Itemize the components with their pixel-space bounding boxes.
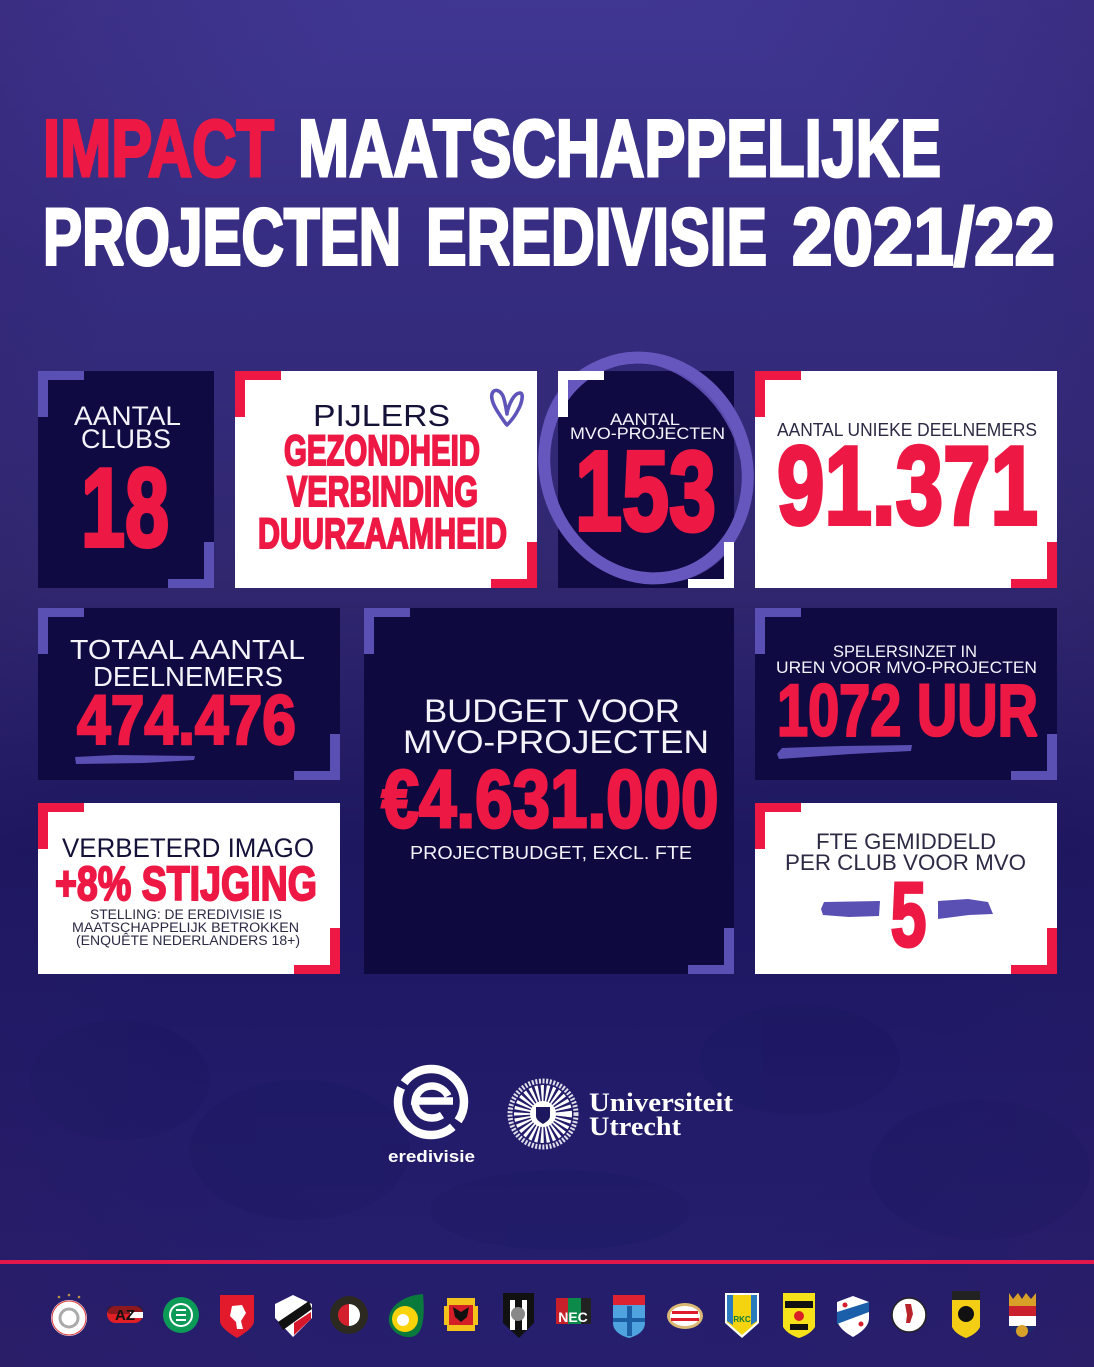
club badges [51,1291,1036,1338]
title: 2021/22 [792,192,1055,282]
panel: unieke deelnemers [755,371,1057,588]
brush underline [75,755,195,764]
panel: aantal mvo-projecten: AANTAL [610,410,680,429]
panel: spelersinzet: UREN VOOR MVO-PROJECTEN [776,658,1037,677]
logo: eredivisie [388,1069,475,1166]
panel: verbeterd imago: +8% STIJGING [55,858,317,911]
panel: pijlers: GEZONDHEID [284,427,480,475]
badge: heerenveen [837,1296,869,1337]
panel: aantal mvo-projecten [503,321,787,617]
badge: rkc: RKC [733,1315,751,1324]
badge: fortuna sittard [389,1294,424,1337]
panel: totaal aantal deelnemers: DEELNEMERS [93,661,283,692]
panel: totaal aantal deelnemers: 474.476 [77,681,296,759]
badge: utrecht [275,1295,312,1337]
badge: vitesse [952,1291,980,1338]
badge: heracles [503,1293,534,1338]
panel: budget: BUDGET VOOR [424,693,680,729]
panel: spelersinzet: SPELERSINZET IN [833,642,977,661]
panel: verbeterd imago: VERBETERD IMAGO [62,833,314,863]
brush marks [821,899,993,919]
badge: nec: NEC [558,1309,588,1325]
icon: heart [492,390,522,425]
badge: sparta [892,1298,926,1332]
badge: twente [220,1295,254,1338]
panel: fte: 5 [890,864,926,966]
title [43,104,1055,282]
panel: aantal clubs: AANTAL [74,401,181,431]
panel: fte: PER CLUB VOOR MVO [785,850,1026,875]
panel: budget: PROJECTBUDGET, EXCL. FTE [410,843,692,863]
badge: willem ii [1009,1293,1036,1337]
panel: budget: €4.631.000 [382,754,718,845]
badge: groningen [163,1297,199,1333]
panel: fte [755,803,1057,974]
title: IMPACT [43,104,274,194]
panel: budget [364,608,734,974]
panel: aantal clubs [38,371,214,588]
badge: go ahead eagles [444,1298,478,1331]
logo: eredivisie: eredivisie [388,1147,475,1166]
panel: aantal clubs: 18 [81,446,169,570]
title: EREDIVISIE [426,192,767,282]
panel: verbeterd imago: STELLING: DE EREDIVISIE IS [90,907,282,922]
badge: pec zwolle [613,1295,645,1338]
badge: nec [556,1298,591,1325]
badge: psv [667,1303,703,1329]
panel: verbeterd imago: (ENQUÊTE NEDERLANDERS 18+) [76,933,300,948]
panel: pijlers: VERBINDING [287,468,478,516]
panel: unieke deelnemers: AANTAL UNIEKE DEELNEMERS [777,420,1037,440]
panel: aantal mvo-projecten: 153 [575,428,716,554]
panel: aantal clubs: CLUBS [81,424,171,454]
panel: totaal aantal deelnemers [38,608,340,780]
logo: universiteit utrecht: Universiteit [589,1088,733,1117]
panel: verbeterd imago: MAATSCHAPPELIJK BETROKKEN [72,920,299,935]
brush underline [777,745,912,759]
logo: universiteit utrecht [510,1081,733,1147]
logo: universiteit utrecht: Utrecht [589,1112,681,1141]
panel: aantal mvo-projecten: MVO-PROJECTEN [570,424,725,443]
badge: az [107,1306,143,1324]
panel: totaal aantal deelnemers: TOTAAL AANTAL [70,634,305,665]
panel: spelersinzet [755,608,1057,780]
divider line [0,1260,1094,1264]
panel: pijlers: DUURZAAMHEID [258,510,507,558]
badge: ajax [51,1294,87,1336]
icon: brush circle [503,321,787,617]
panel: pijlers [235,371,537,588]
panel: pijlers: PIJLERS [313,398,450,433]
panel: verbeterd imago [38,803,340,974]
badge: rkc [725,1293,759,1338]
panel: fte: FTE GEMIDDELD [816,829,996,854]
title: PROJECTEN [43,192,401,282]
badge: feyenoord [330,1296,368,1334]
badge: az: AZ [115,1307,135,1324]
panel: budget: MVO-PROJECTEN [403,724,709,760]
badge: cambuur [783,1293,815,1338]
